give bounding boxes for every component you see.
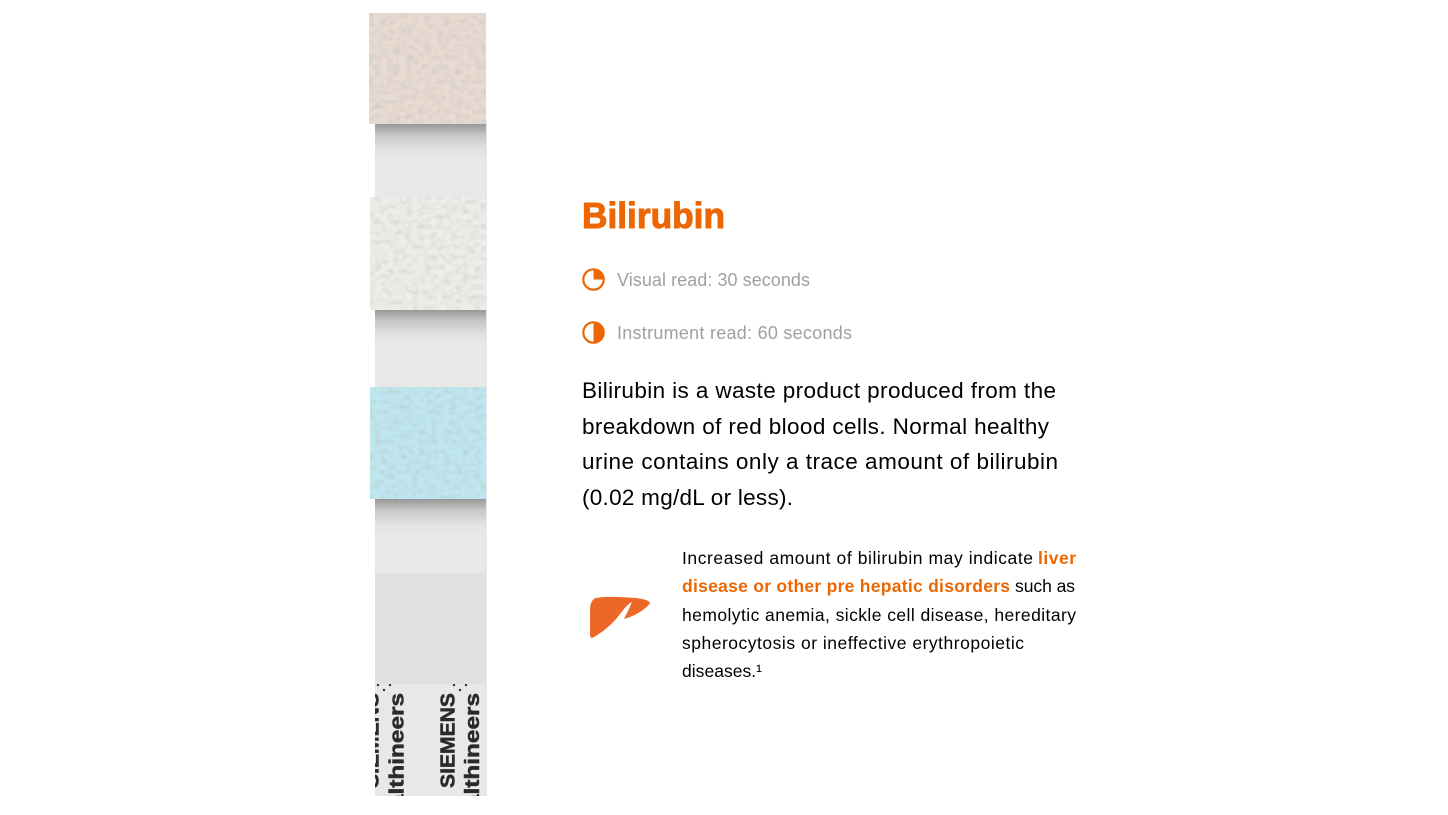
strip logo text: althineers [386,693,408,808]
icon: quarter clock [583,269,604,290]
strip pad: grey [375,573,486,684]
description paragraph: urine contains only a trace amount of bilirubin [582,449,1058,474]
liver disease note: spherocytosis or ineffective erythropoietic [682,633,1024,653]
strip logo text: SIEMENS [438,693,460,788]
liver disease note: diseases.¹ [682,661,762,681]
strip logo text [375,684,480,796]
description paragraph: Bilirubin is a waste product produced from the [582,378,1056,403]
test strip [362,13,487,808]
description paragraph: (0.02 mg/dL or less). [582,485,793,510]
instrument read time: Instrument read: 60 seconds [617,323,852,343]
title: Bilirubin [582,195,725,236]
liver disease note: Increased amount of bilirubin may indicate [682,548,1033,568]
icon: half clock [583,322,604,343]
visual read time: Visual read: 30 seconds [617,270,810,290]
strip logo text: althineers [462,693,484,808]
liver disease note: disease or other pre hepatic disorders [682,576,1010,596]
strip pad: off-white [370,197,486,310]
description paragraph [582,378,1058,510]
strip pad: light blue [370,387,486,499]
liver disease note: liver [1038,548,1076,568]
strip pad: beige [369,13,486,124]
icon: liver [590,597,650,638]
liver disease note: hemolytic anemia, sickle cell disease, hereditary [682,605,1076,625]
strip logo text: SIEMENS [362,693,384,788]
liver disease note: such as [1015,576,1075,596]
description paragraph: breakdown of red blood cells. Normal healthy [582,414,1050,439]
liver disease note [682,548,1076,681]
